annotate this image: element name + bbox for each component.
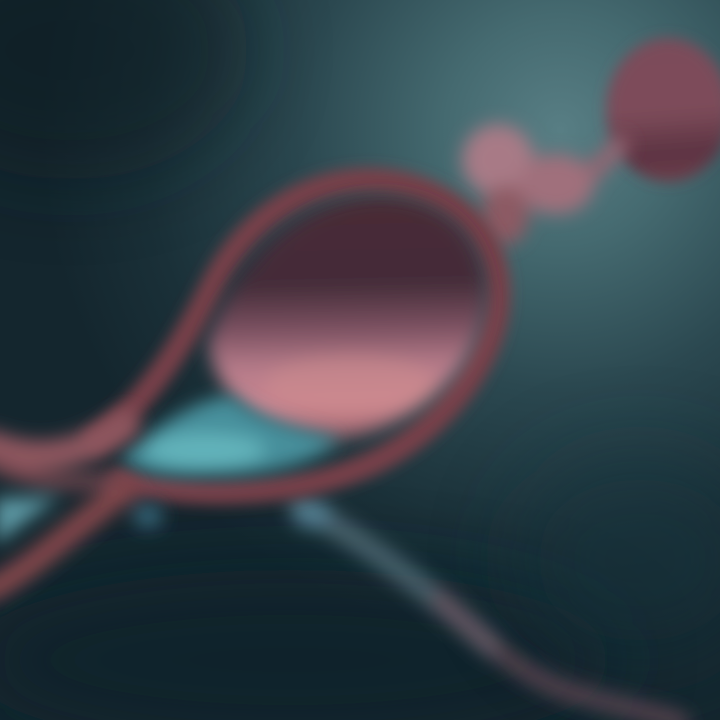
loop interior <box>208 196 486 438</box>
pink connector blobs <box>462 124 625 245</box>
loop outline <box>95 180 499 492</box>
cyan pool <box>120 396 340 476</box>
tail strand to bottom right <box>292 499 680 720</box>
left crossing strands <box>0 425 163 590</box>
ball at upper right <box>606 38 720 182</box>
